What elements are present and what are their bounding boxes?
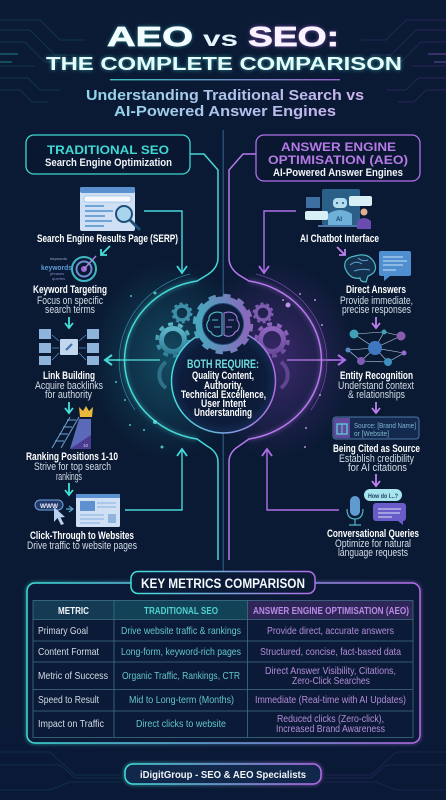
text: keyword targeting: Focus on specific (37, 295, 103, 307)
row: content format (38, 646, 401, 658)
footer badge: iDigitGroup - SEO & AEO Specialists (140, 769, 306, 781)
text: link building: for authority (45, 389, 92, 401)
panel: AEO header: OPTIMISATION (AEO) (268, 153, 408, 167)
title: SEO: (248, 21, 339, 52)
text: entity recognition: & relationships (348, 389, 405, 401)
text: entity recognition (338, 370, 414, 401)
text: click-through (27, 530, 137, 552)
heading: key metrics (131, 572, 315, 594)
gear: small right (254, 304, 272, 322)
arrow: chatbot to core (259, 211, 296, 273)
side gears (157, 304, 288, 388)
text: ranking positions: rankings (56, 471, 82, 483)
text: direct answers: Direct Answers (346, 284, 406, 296)
table header: ANSWER ENGINE OPTIMISATION (AEO) (253, 606, 409, 617)
icon: ranking ladder: 10 (83, 443, 89, 448)
title divider (110, 79, 340, 80)
text: direct answers (340, 284, 413, 316)
arrow: link to ranking (65, 402, 73, 413)
icon: conversational queries (347, 489, 406, 525)
text: direct answers: precise responses (342, 304, 411, 316)
text: being cited (333, 443, 420, 474)
connectors and ring: teal side (119, 154, 218, 560)
row: impact on traffic: Reduced clicks (Zero-click), (277, 713, 384, 725)
row: primary goal (38, 625, 394, 637)
text: requirements (181, 370, 266, 419)
arrow: core to entity (328, 355, 345, 365)
heading: both require: BOTH REQUIRE: (187, 359, 259, 371)
row: impact on traffic: Increased Brand Awareness (276, 723, 385, 735)
row: metric of success: Direct Answer Visibility, Citations, (265, 665, 396, 677)
sparkles purple (282, 293, 323, 448)
icon: conversational queries: How do I...? (368, 493, 398, 500)
row: speed to result: Immediate (Real-time with AI Updates) (255, 694, 406, 706)
text: keyword targeting (33, 284, 107, 316)
row: content format: Content Format (38, 646, 99, 658)
text: ranking positions: Ranking Positions 1-10 (26, 451, 118, 463)
icon: keyword target: queries (52, 276, 65, 281)
title: AEO (107, 21, 193, 52)
row: speed to result: Speed to Result (38, 694, 99, 706)
icon: keyword target (41, 256, 96, 281)
panel: traditional SEO header: Search Engine Optimization (45, 157, 172, 169)
table: comparison (33, 600, 413, 738)
panel: key metrics (27, 583, 420, 743)
central glow (90, 260, 250, 460)
panel: both require (172, 329, 276, 433)
icon: keyword target: keywords (41, 263, 72, 272)
panel: AEO header: ANSWER ENGINE (281, 140, 396, 154)
title: AEO (107, 21, 193, 52)
text: entity recognition: Entity Recognition (340, 370, 413, 382)
heading: key metrics: KEY METRICS COMPARISON (141, 576, 305, 591)
text: conversational queries: language requests (338, 547, 408, 559)
icon: ranking ladder (52, 406, 93, 449)
row: impact on traffic (38, 713, 385, 735)
text: requirements: Authority, (204, 380, 243, 392)
text: click-through: Click-Through to Websites (30, 530, 134, 542)
title: SEO: (248, 21, 339, 52)
arrow: answers to entity (372, 317, 380, 328)
title: vs (203, 28, 238, 51)
row: metric of success: Organic Traffic, Rankings, CTR (122, 670, 240, 682)
row: metric of success (38, 665, 396, 687)
connectors and ring: purple side (229, 154, 327, 560)
text: being cited: for AI citations (348, 462, 408, 474)
subtitle (86, 87, 364, 120)
text: requirements: Technical Excellence, (181, 389, 266, 401)
icon: source citation: or [Website] (354, 429, 389, 438)
text: conversational queries: Optimize for natural (335, 538, 411, 550)
row: primary goal: Provide direct, accurate answers (267, 625, 394, 637)
gear: left (157, 324, 189, 356)
arrow: entity to cited (372, 402, 380, 413)
subtitle: Understanding Traditional Search vs (86, 87, 364, 104)
text: conversational queries (327, 528, 419, 559)
arrow: core to link building (105, 355, 120, 365)
icon: AI chatbot (305, 189, 372, 229)
title (46, 21, 402, 74)
panel: AEO header: AI-Powered Answer Engines (273, 167, 403, 179)
row: primary goal: Primary Goal (38, 625, 88, 637)
text: click-through: Drive traffic to website pages (27, 540, 137, 552)
panel: traditional SEO header (26, 135, 190, 174)
table header: METRIC (58, 606, 89, 617)
row: content format: Long-form, keyword-rich pages (121, 646, 241, 658)
panel: traditional SEO header: TRADITIONAL SEO (47, 143, 169, 157)
central glow purple (196, 260, 356, 460)
gear: small left (172, 304, 192, 322)
icon: click-through (35, 494, 120, 527)
arrow: cited to conversational (372, 474, 380, 486)
footer badge (125, 764, 321, 784)
text: direct answers: Provide immediate, (340, 295, 413, 307)
icon: brain and answer bubble (345, 251, 411, 282)
text: SERP: Search Engine Results Page (SERP) (37, 233, 178, 245)
icon: SERP (80, 187, 140, 231)
panel: AEO header (256, 135, 420, 181)
arrow: chatbot to direct answers (337, 247, 345, 255)
row: speed to result: Mid to Long-term (Months) (129, 694, 234, 706)
icon: link building (39, 329, 99, 365)
arrow: queries to core (262, 449, 339, 510)
gear: main (194, 296, 252, 352)
icon: keyword target: keywords (50, 256, 67, 261)
text: link building: Acquire backlinks (35, 380, 103, 392)
text: being cited: Being Cited as Source (333, 443, 420, 455)
text: requirements: Understanding (194, 407, 252, 419)
text: ranking positions: Strive for top search (34, 461, 111, 473)
text: requirements: User Intent (201, 398, 246, 410)
icon: keyword target: phrases (50, 271, 64, 276)
arrow: SERP to keyword (101, 246, 110, 255)
row: speed to result (38, 694, 406, 706)
text: keyword targeting: Keyword Targeting (33, 284, 107, 296)
row: metric of success: Metric of Success (38, 670, 108, 682)
subtitle: AI-Powered Answer Engines (114, 103, 336, 120)
text: ranking positions (26, 451, 118, 483)
arrow: keyword to link (65, 317, 73, 328)
text: AI chatbot: AI Chatbot Interface (300, 233, 379, 245)
arrow: ranking to clickthrough (65, 483, 73, 495)
icon: brain (207, 312, 239, 336)
row: impact on traffic: Direct clicks to website (136, 718, 226, 730)
gear: lower left (159, 362, 166, 388)
text: requirements: Quality Content, (192, 370, 254, 382)
icon: source citation (333, 417, 419, 439)
text: being cited: Establish credibility (339, 453, 414, 465)
arrow: websites to core (125, 449, 187, 510)
arrow: SERP to core (144, 211, 187, 273)
row: primary goal: Drive website traffic & rankings (121, 625, 241, 637)
icon: click-through: WWW (40, 503, 59, 510)
title: THE COMPLETE COMPARISON (46, 54, 402, 74)
gear: right (256, 324, 288, 356)
text: link building (35, 370, 103, 401)
sparkles (115, 292, 164, 448)
icon: AI chatbot: AI (336, 217, 342, 223)
row: content format: Structured, concise, fact-based data (260, 646, 401, 658)
row: metric of success: Zero-Click Searches (292, 675, 370, 687)
title: THE COMPLETE COMPARISON (46, 54, 402, 74)
text: entity recognition: Understand context (338, 380, 414, 392)
table header (58, 606, 409, 617)
text: keyword targeting: search terms (45, 304, 95, 316)
text: link building: Link Building (43, 370, 95, 382)
row: impact on traffic: Impact on Traffic (38, 718, 104, 730)
table header: TRADITIONAL SEO (144, 606, 218, 617)
icon: entity network (346, 330, 406, 366)
gear: lower right (281, 362, 288, 388)
text: conversational queries: Conversational Queries (327, 528, 419, 540)
icon: source citation: Source: [Brand Name] (354, 421, 416, 430)
